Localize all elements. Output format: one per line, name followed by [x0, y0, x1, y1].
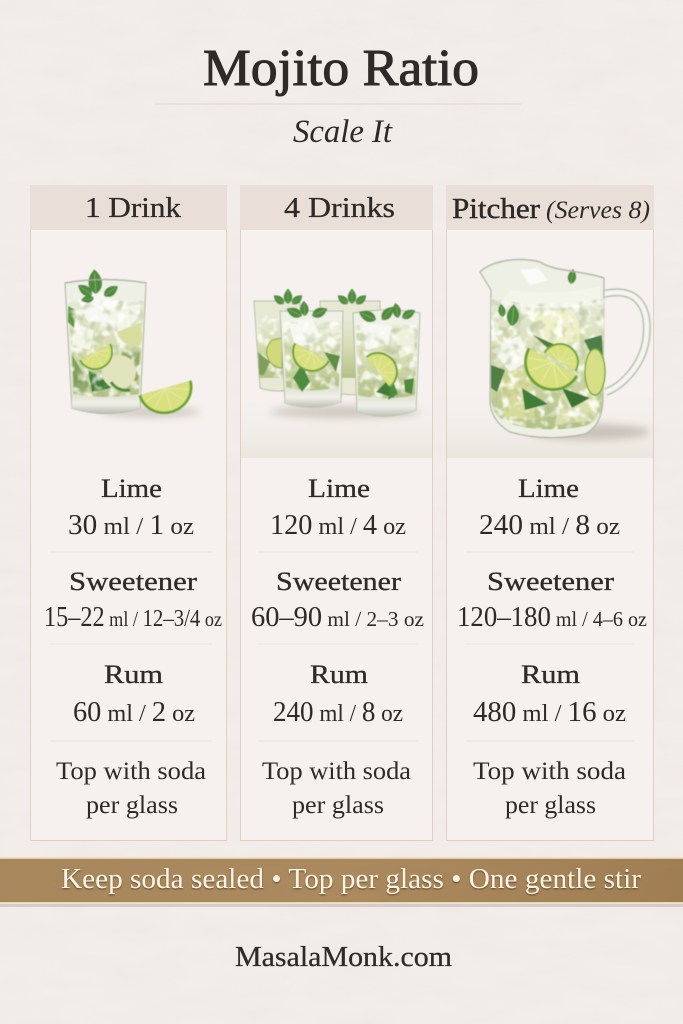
soda note [473, 756, 626, 819]
subtitle: Scale It [293, 114, 393, 150]
soda note: per glass [505, 790, 596, 819]
ingredient: rum: 60 ml / 2 oz [73, 697, 195, 728]
handle [604, 292, 647, 392]
tip banner [0, 858, 683, 907]
illustration: single mojito glass with lime wedge [65, 269, 200, 421]
ingredient: lime [68, 474, 194, 541]
panel: 1 drink [30, 185, 227, 840]
ingredient: rum [73, 660, 195, 728]
soda note: per glass [292, 790, 384, 819]
illustration: four mojito glasses [254, 289, 420, 418]
ingredient: sweetener: 60–90 ml / 2–3 oz [251, 602, 424, 633]
ingredient: sweetener [457, 567, 647, 633]
ingredient: rum: Rum [310, 660, 368, 689]
ingredient: sweetener: Sweetener [276, 567, 401, 596]
heading: Pitcher (Serves 8) [452, 193, 650, 225]
ingredient: rum: 480 ml / 16 oz [473, 697, 626, 728]
ingredient: rum: Rum [104, 660, 163, 689]
heading: 1 Drink: 1 Drink [85, 192, 182, 224]
illustration: glass pitcher [480, 260, 650, 440]
heading: 4 Drinks: 4 Drinks [284, 192, 395, 224]
ingredient: sweetener [251, 567, 424, 633]
tip banner: Keep soda sealed • Top per glass • One gentle stir [61, 864, 642, 895]
soda note [262, 756, 411, 819]
ingredient: lime: Lime [101, 474, 162, 503]
front middle glass [280, 311, 343, 407]
ingredient: lime [479, 474, 620, 541]
soda note: Top with soda [473, 756, 626, 785]
heading: Pitcher (Serves 8): Pitcher [452, 193, 540, 225]
heading: Pitcher (Serves 8): (Serves 8) [546, 197, 650, 224]
title: Mojito Ratio [203, 40, 479, 97]
ingredient: sweetener: Sweetener [69, 567, 197, 596]
ingredient: sweetener [44, 567, 222, 633]
ingredient: rum: 240 ml / 8 oz [273, 697, 403, 728]
ingredient: lime: 30 ml / 1 oz [68, 510, 194, 541]
ingredient: rum [273, 660, 403, 728]
ingredient: lime: Lime [308, 474, 370, 503]
panel: pitcher [446, 185, 654, 840]
panel: 4 drinks [240, 185, 433, 840]
soda note [56, 756, 206, 819]
ingredient: rum: Rum [521, 660, 580, 689]
soda note: per glass [86, 790, 178, 819]
front right glass [353, 310, 420, 416]
ingredient: rum [473, 660, 626, 728]
soda note: Top with soda [262, 756, 411, 785]
ingredient: lime: Lime [518, 474, 579, 503]
body [480, 260, 604, 438]
ingredient: sweetener: 120–180 ml / 4–6 oz [457, 602, 647, 633]
ingredient: lime [270, 474, 406, 541]
ingredient: sweetener: 15–22 ml / 12–3/4 oz [44, 602, 222, 633]
soda note: Top with soda [56, 756, 206, 785]
back glasses [254, 301, 300, 391]
footer website: MasalaMonk.com [235, 942, 452, 973]
ingredient: lime: 120 ml / 4 oz [270, 510, 406, 541]
ingredient: sweetener: Sweetener [487, 567, 614, 596]
ingredient: lime: 240 ml / 8 oz [479, 510, 620, 541]
